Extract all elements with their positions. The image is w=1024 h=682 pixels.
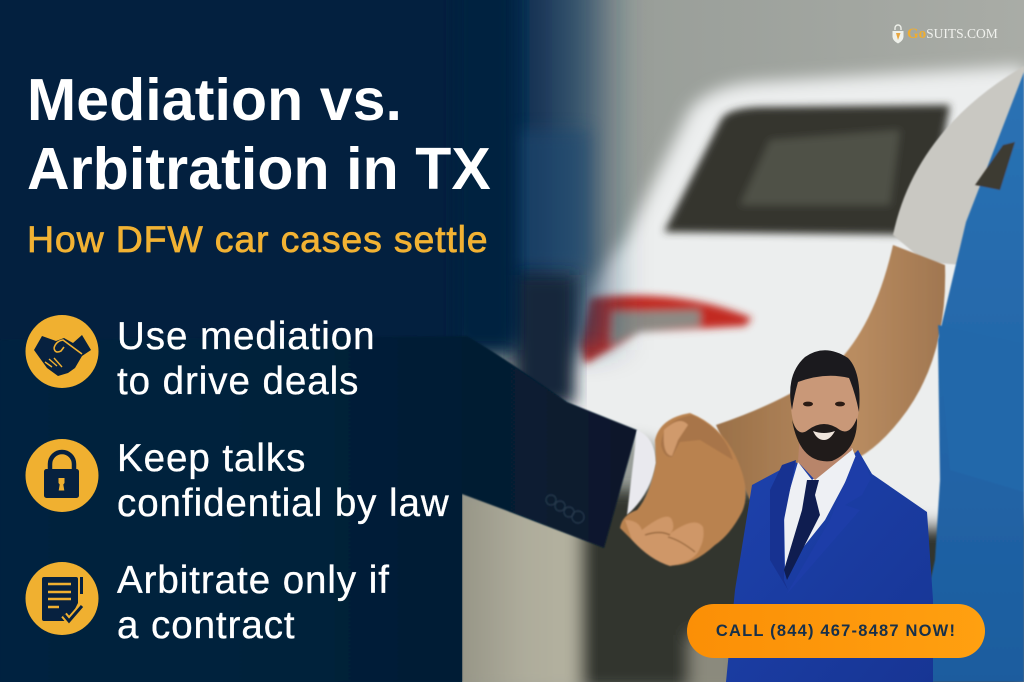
list item: confidentiality: Keep talks xyxy=(117,437,306,480)
mechanic shirt xyxy=(893,66,1024,270)
navy suit arm and body xyxy=(0,336,637,682)
shirt xyxy=(784,448,857,570)
logo xyxy=(892,24,998,44)
list item: mediation: to drive deals xyxy=(117,360,359,403)
list item: arbitration: a contract xyxy=(117,604,296,647)
clasped hands xyxy=(620,413,746,566)
neck xyxy=(798,430,852,480)
hair xyxy=(790,350,860,412)
title xyxy=(27,67,491,202)
title: Mediation vs. xyxy=(27,67,402,133)
logo text: GoSUITS.COM xyxy=(907,26,998,42)
icon: contract document xyxy=(26,562,98,635)
taillight xyxy=(580,296,752,364)
mechanic overalls xyxy=(908,72,1024,682)
navy panel xyxy=(0,0,630,682)
list item: arbitration: Arbitrate only if xyxy=(117,559,390,602)
list item: mediation: Use mediation xyxy=(117,315,375,358)
shirt cuff xyxy=(627,430,656,515)
mechanic arm xyxy=(716,245,945,500)
lawyer portrait xyxy=(726,350,933,682)
title: Arbitration in TX xyxy=(27,136,491,202)
lapels xyxy=(770,460,796,590)
list item: confidentiality xyxy=(117,437,450,525)
icon: handshake xyxy=(26,315,98,388)
rear window xyxy=(664,105,950,235)
tie xyxy=(784,480,820,580)
smile xyxy=(813,431,835,440)
call to action button xyxy=(687,604,985,658)
list item: arbitration xyxy=(116,559,390,647)
eyes xyxy=(803,402,813,406)
head xyxy=(791,359,859,451)
jacket xyxy=(726,450,933,682)
blurred car and garage xyxy=(440,66,1024,682)
beard xyxy=(792,418,857,461)
icon: padlock xyxy=(26,439,98,512)
icon: logo padlock xyxy=(892,24,904,44)
list item: confidentiality: confidential by law xyxy=(117,482,450,525)
list item: mediation xyxy=(117,315,375,403)
subtitle: How DFW car cases settle xyxy=(27,218,488,260)
call to action button: CALL (844) 467-8487 NOW! xyxy=(716,622,956,640)
